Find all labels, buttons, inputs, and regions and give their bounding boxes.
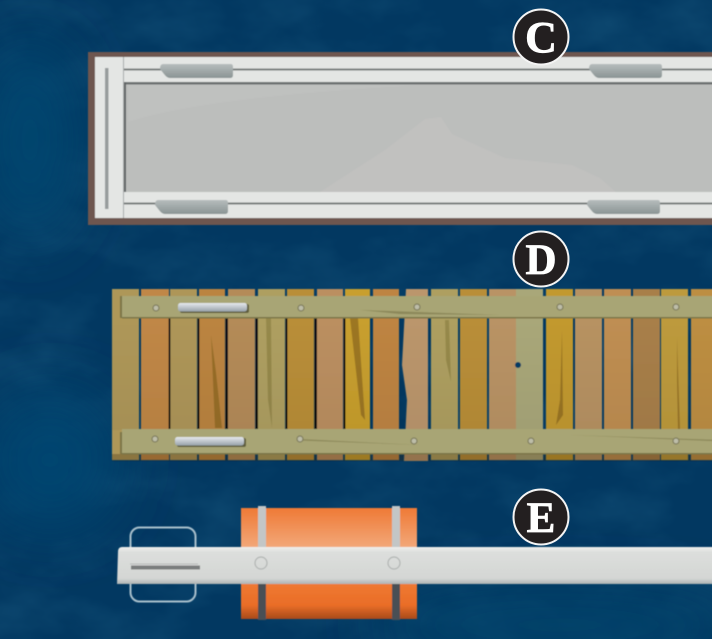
clip top right — [589, 64, 662, 78]
wood grain marks — [211, 318, 680, 430]
panel C: grey dock section — [88, 52, 712, 225]
glass surface — [123, 82, 712, 192]
badge E — [514, 490, 568, 544]
orange float — [241, 506, 417, 620]
planks — [112, 289, 712, 461]
strip shadows and cracks — [120, 296, 712, 454]
brown outer frame — [88, 52, 712, 225]
badge D — [514, 232, 568, 286]
clip bottom left — [155, 200, 228, 214]
top slider bar — [178, 303, 249, 313]
top cross strip — [122, 296, 712, 318]
plank end shadows — [112, 454, 712, 461]
panel E: float and rail — [117, 506, 712, 620]
white rail — [117, 547, 712, 584]
hole in plank — [515, 362, 521, 368]
clip top left — [160, 64, 233, 78]
bottom cross strip — [122, 429, 712, 454]
badge D: D — [525, 237, 557, 284]
clip bottom right — [587, 200, 660, 214]
badge C — [514, 10, 568, 64]
rail bolt holes — [255, 557, 400, 569]
light frame — [95, 57, 712, 218]
badge E: E — [527, 495, 555, 542]
dark plank gaps — [168, 318, 346, 430]
plank shading — [112, 318, 712, 430]
panel D: wooden dock section — [112, 289, 712, 461]
bottom slider bar — [175, 437, 246, 447]
bolts — [152, 304, 679, 444]
frame grooves — [105, 57, 712, 218]
badge C: C — [525, 13, 557, 62]
rail slot — [130, 564, 200, 570]
rounded cleat outline — [130, 528, 196, 602]
